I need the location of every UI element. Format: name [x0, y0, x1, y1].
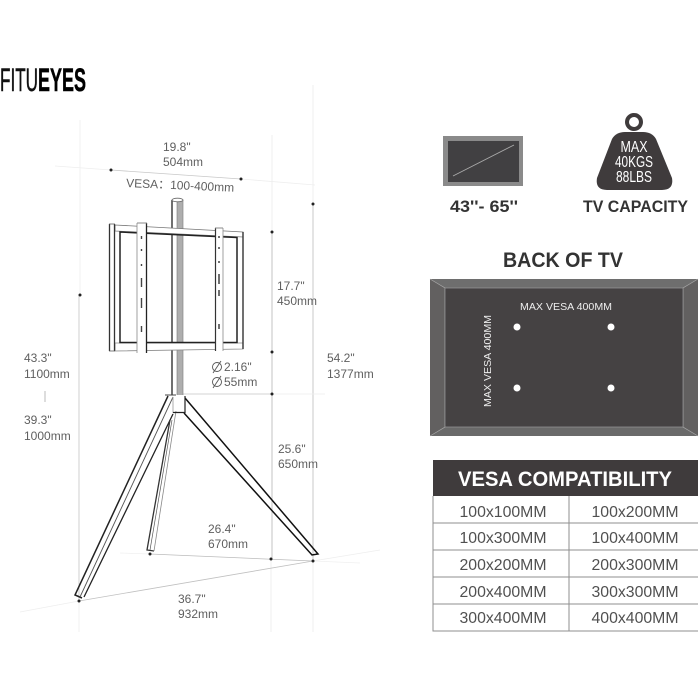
table values: 100x100MM	[460, 504, 546, 521]
mounting holes	[514, 324, 614, 392]
label: upper height	[277, 279, 317, 308]
icon: weight: 40KGS	[615, 154, 653, 171]
back leg	[147, 411, 176, 551]
logo: EYES	[38, 62, 86, 98]
table values: 300x300MM	[592, 584, 678, 601]
label: left height: 1000mm	[24, 429, 71, 443]
icon: TV size	[443, 136, 523, 186]
dimension lines	[20, 85, 380, 632]
mount frame	[109, 224, 243, 351]
mount bracket right	[215, 228, 223, 351]
dimension points	[78, 168, 314, 602]
panel: back of TV diagram	[430, 279, 698, 436]
mount bracket left	[137, 223, 147, 353]
illustration: tripod TV stand	[75, 198, 318, 598]
label: base width: 932mm	[178, 607, 218, 621]
label: top width: 504mm	[163, 155, 203, 169]
label: left height: 1100mm	[24, 367, 70, 381]
label: base width: 36.7"	[178, 592, 206, 606]
table values: 200x200MM	[460, 557, 546, 574]
left leg	[75, 396, 173, 598]
label: upper height: 17.7"	[277, 279, 305, 293]
table values: 100x300MM	[460, 530, 546, 547]
label: lower height	[278, 442, 318, 471]
icon: weight: MAX	[620, 139, 648, 156]
TV size label: 43''- 65''	[450, 197, 518, 216]
table values: 200x400MM	[460, 584, 546, 601]
table values	[460, 504, 678, 627]
table values: 200x300MM	[592, 557, 678, 574]
table values: 300x400MM	[460, 610, 546, 627]
label: rear depth	[208, 522, 248, 551]
label: base width	[178, 592, 218, 621]
table header	[433, 460, 698, 496]
label: VESA: VESA：100-400mm	[126, 176, 234, 195]
TV capacity label: TV CAPACITY	[583, 197, 689, 216]
collar	[165, 395, 185, 413]
right leg	[184, 398, 318, 555]
label: left height: 39.3"	[24, 413, 52, 427]
vertical VESA label: MAX VESA 400MM	[483, 315, 494, 407]
label: total height: 54.2"	[327, 351, 355, 365]
label: left height	[24, 351, 71, 443]
label: rear depth: 26.4"	[208, 522, 236, 536]
pole	[172, 198, 183, 395]
icon: weight: 88LBS	[616, 169, 652, 186]
logo: FITU	[0, 62, 38, 98]
table header: VESA COMPATIBILITY	[458, 468, 672, 491]
label: upper height: 450mm	[277, 294, 317, 308]
table values: 400x400MM	[592, 610, 678, 627]
label: left height: 43.3"	[24, 351, 52, 365]
label: pole diameter	[212, 360, 257, 389]
label: total height: 1377mm	[327, 367, 374, 381]
label: top width	[163, 140, 203, 169]
icon: weight	[597, 115, 672, 190]
horizontal VESA label: MAX VESA 400MM	[520, 302, 612, 313]
label: lower height: 650mm	[278, 457, 318, 471]
table: VESA compatibility	[433, 460, 698, 631]
label: total height	[327, 351, 374, 381]
table values: 100x200MM	[592, 504, 678, 521]
label: pole diameter: 2.16"	[224, 360, 252, 374]
table values: 100x400MM	[592, 530, 678, 547]
label: rear depth: 670mm	[208, 537, 248, 551]
heading: back of TV: BACK OF TV	[503, 249, 623, 272]
label: top width: 19.8"	[163, 140, 191, 154]
label: lower height: 25.6"	[278, 442, 306, 456]
label: pole diameter: 55mm	[224, 375, 257, 389]
